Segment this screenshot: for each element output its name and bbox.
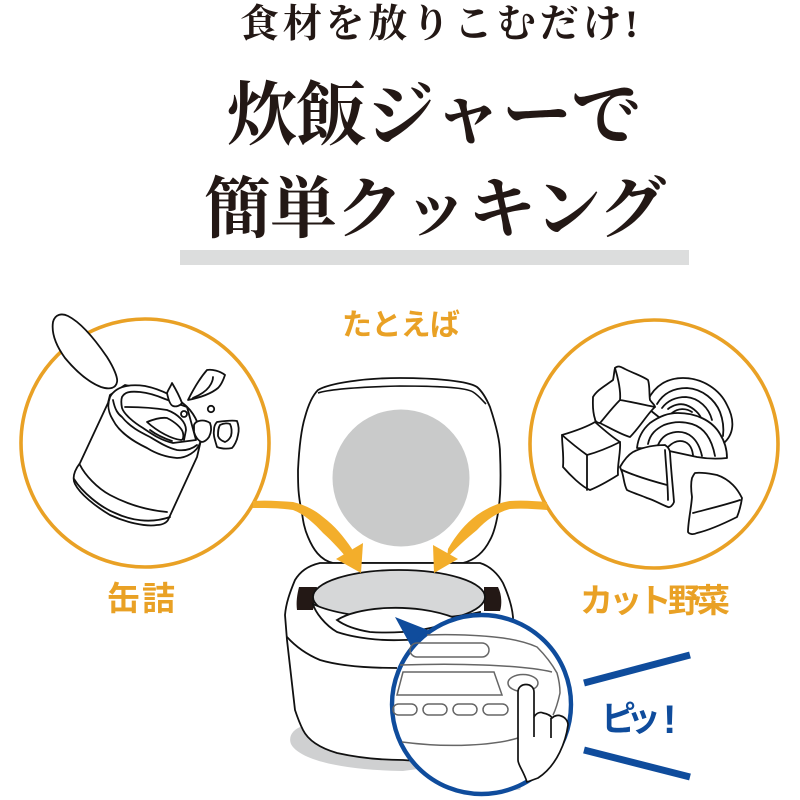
title line 1: 炊飯ジャーで — [225, 78, 641, 155]
arrow: from vegetables to cooker — [447, 501, 547, 558]
icon: cut vegetables — [562, 366, 742, 534]
label: ピッ!: ピッ — [601, 700, 661, 739]
panel: zoomed control panel — [392, 615, 571, 794]
panel: cut vegetables circle — [530, 320, 778, 568]
arrow head left — [336, 543, 363, 573]
shadow — [290, 726, 425, 771]
cooker body — [285, 563, 513, 762]
title line 2: 簡単クッキング — [204, 173, 666, 247]
panel: canned food circle — [21, 314, 269, 567]
title underline bar — [180, 250, 689, 265]
lid inner circle — [332, 410, 470, 546]
sound line bottom — [584, 750, 690, 777]
rice cooker — [285, 378, 525, 790]
label: 缶詰: 缶詰 — [107, 580, 175, 617]
icon: pressing finger — [518, 684, 568, 782]
arrow: from can to cooker — [253, 501, 352, 562]
cooker lid — [298, 378, 501, 563]
inner pot — [313, 570, 485, 624]
callout pointer — [395, 617, 428, 648]
label: たとえば: たとえば — [342, 309, 460, 342]
subtitle: 食材を放りこむだけ! — [240, 3, 638, 46]
handles — [297, 587, 317, 610]
arrow head right — [433, 545, 458, 573]
label: カット野菜: カット野菜 — [580, 582, 730, 619]
sound line top — [584, 655, 690, 683]
label: ピッ!: ! — [663, 698, 676, 742]
icon: can — [53, 314, 239, 525]
